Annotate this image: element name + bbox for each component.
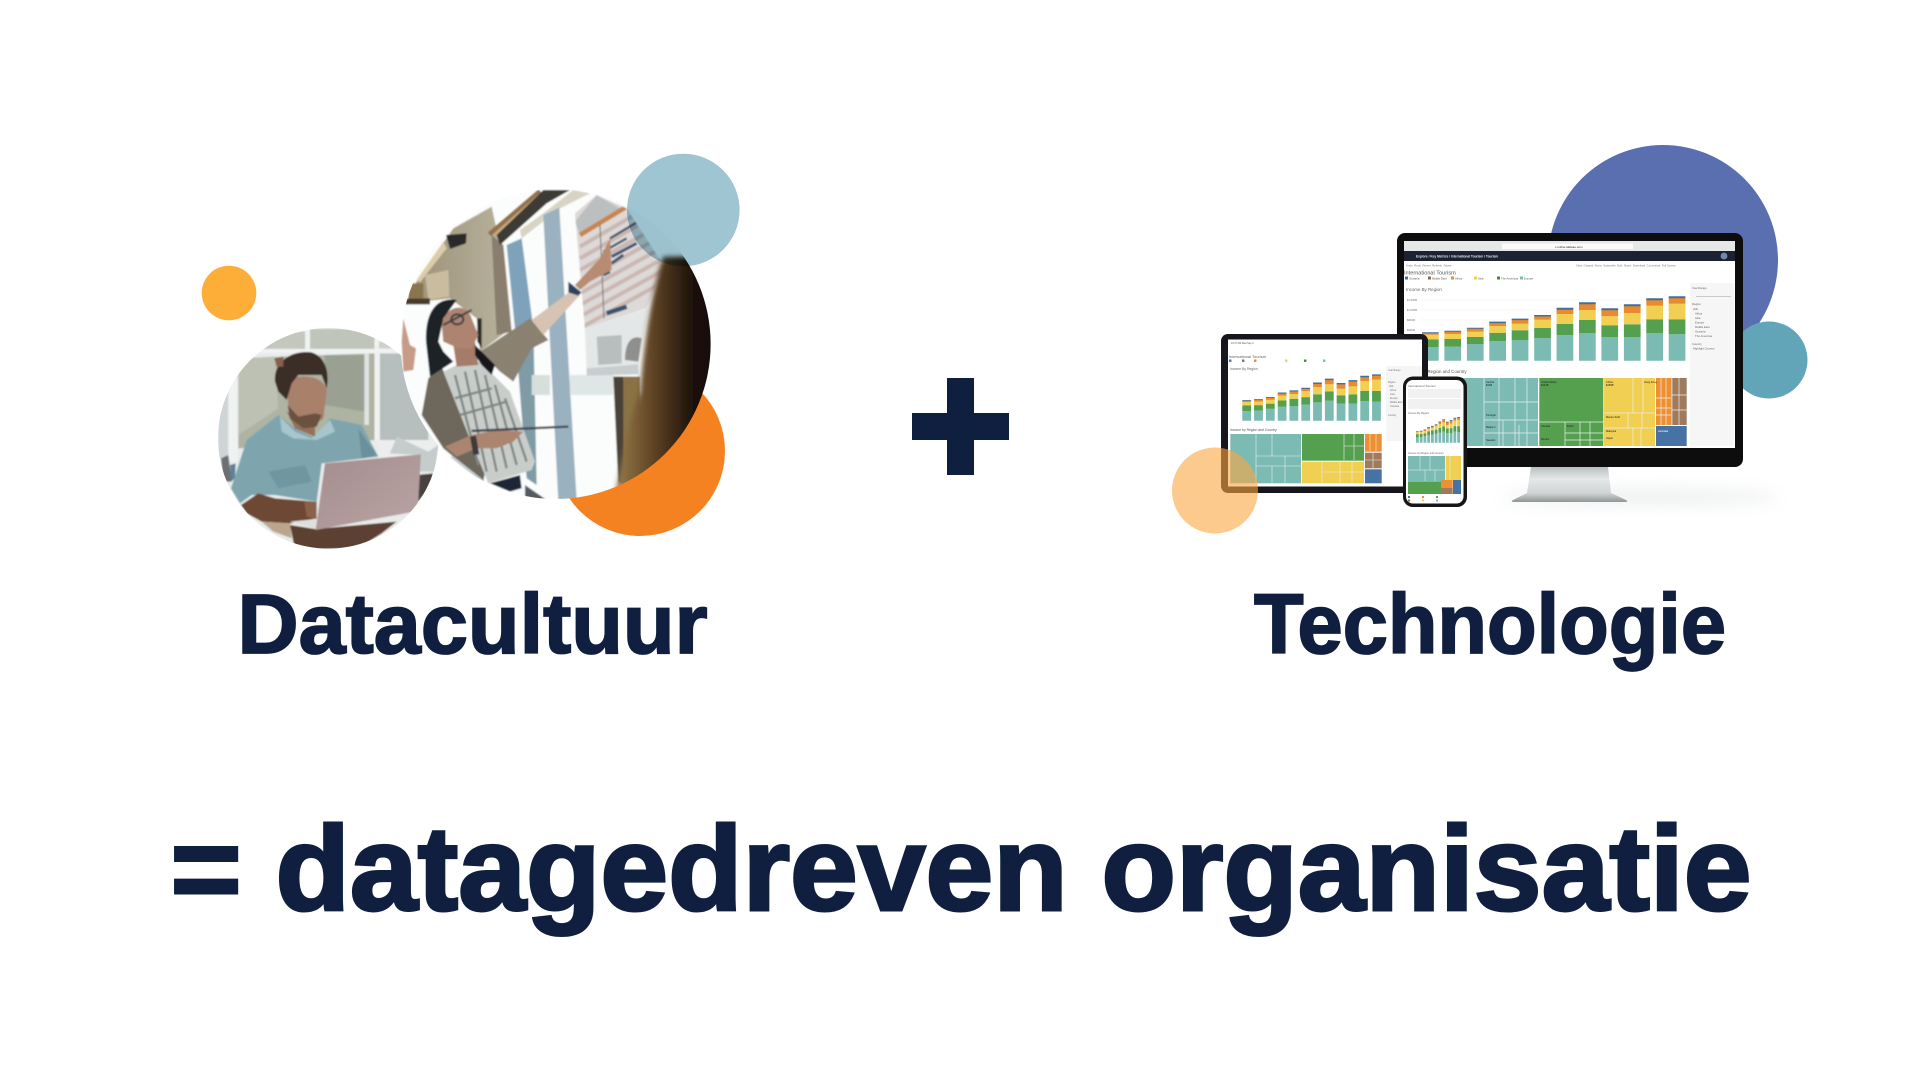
- tablet screen: Income By Region: [1230, 367, 1258, 371]
- monitor filter sidebar: [1690, 283, 1734, 446]
- phone with dashboard: [1403, 376, 1467, 507]
- tablet screen: 10:27 AM Wed Sep 4: [1231, 342, 1254, 345]
- monitor screen: Income by Region and Country: [1406, 369, 1467, 374]
- monitor y-axis labels: [1407, 298, 1417, 332]
- monitor treemap: $289B: [1606, 383, 1614, 387]
- tablet screen: International Tourism: [1229, 354, 1267, 359]
- monitor legend: Middle East: [1432, 276, 1447, 280]
- monitor filter sidebar: (All): [1693, 307, 1698, 311]
- monitor screen: Undo Redo Revert Refresh Pause: [1406, 264, 1452, 268]
- monitor y-axis labels: $1,000M: [1407, 308, 1417, 312]
- decorative circle: indigo: [1548, 145, 1778, 375]
- tablet filter sidebar: Middle East: [1390, 401, 1403, 404]
- monitor stand: [1512, 467, 1627, 502]
- monitor legend: Asia: [1478, 276, 1484, 280]
- phone screen: International Tourism: [1408, 384, 1436, 388]
- tablet filter sidebar: Africa: [1390, 389, 1397, 392]
- tablet screen: Income by Region and Country: [1230, 428, 1277, 432]
- monitor y-axis labels: $800M: [1407, 318, 1415, 322]
- tablet filter sidebar: Oceania: [1390, 405, 1400, 408]
- tablet filter sidebar: Asia: [1390, 393, 1395, 396]
- monitor treemap: Hong Kong: [1644, 380, 1658, 384]
- monitor legend: Oceania: [1409, 276, 1420, 280]
- monitor filter sidebar: Middle East: [1695, 325, 1710, 329]
- monitor screen: View: Original Alerts Subscribe Edit Share Download Comments Full Screen: [1576, 264, 1676, 268]
- monitor treemap: Portugal: [1486, 413, 1496, 417]
- phone legend: [1408, 496, 1438, 502]
- monitor bezel: [1397, 233, 1743, 467]
- monitor treemap: Malaysia: [1606, 429, 1617, 433]
- decorative circle: teal: [1730, 322, 1808, 398]
- heading: Datacultuur: Datacultuur: [238, 577, 708, 671]
- monitor treemap: Australia: [1658, 429, 1669, 433]
- phone screen: Income By Region: [1408, 411, 1430, 415]
- tablet with dashboard: [1221, 334, 1428, 493]
- monitor filter sidebar: Oceania: [1695, 330, 1706, 334]
- monitor screen: Income By Region: [1406, 287, 1442, 292]
- tablet filter sidebar: (All): [1389, 385, 1393, 388]
- monitor treemap: [1406, 378, 1687, 446]
- phone bar chart: [1416, 417, 1460, 443]
- phone screen: Income by Region and Country: [1408, 451, 1444, 455]
- monitor filter sidebar: Highlight Country: [1693, 346, 1715, 350]
- decorative circle: light blue: [627, 154, 740, 266]
- tablet filter sidebar: Region: [1388, 381, 1396, 384]
- photo: woman presenting at a screen: [401, 189, 711, 499]
- monitor legend: The Americas: [1501, 276, 1519, 280]
- monitor with dashboard: [1397, 233, 1743, 502]
- tablet screen: [1228, 340, 1422, 486]
- monitor treemap: United States: [1541, 380, 1557, 384]
- photo: man working on laptop: [215, 325, 445, 555]
- decorative circle: small orange dot: [202, 266, 256, 320]
- monitor treemap: $243B: [1541, 383, 1549, 387]
- monitor filter sidebar: Country: [1692, 342, 1702, 346]
- monitor filter sidebar: The Americas: [1695, 334, 1713, 338]
- plus sign: [912, 378, 1009, 475]
- tablet bezel: [1221, 334, 1428, 493]
- monitor treemap: Belgium: [1486, 425, 1495, 429]
- tablet filter sidebar: Europe: [1390, 397, 1398, 400]
- heading: Technologie: Technologie: [1254, 577, 1726, 671]
- monitor filter sidebar: Year Range: [1692, 286, 1707, 290]
- monitor treemap: Mexico: [1541, 437, 1550, 441]
- monitor treemap: $24B: [1486, 383, 1492, 387]
- phone bezel: [1403, 376, 1467, 507]
- monitor bar chart: [1422, 296, 1685, 361]
- monitor screen: International Tourism: [1404, 270, 1456, 276]
- monitor treemap: Austria: [1486, 380, 1495, 384]
- monitor legend: [1405, 276, 1533, 280]
- monitor y-axis labels: $1,500M: [1407, 298, 1417, 302]
- tablet filter sidebar: Year Range: [1388, 369, 1401, 372]
- monitor treemap: Brazil: [1567, 424, 1574, 428]
- monitor screen: c.online.tableau.com: [1555, 245, 1583, 249]
- monitor filter sidebar: Europe: [1695, 320, 1704, 324]
- monitor treemap: Japan: [1606, 436, 1614, 440]
- monitor screen: [1404, 241, 1735, 448]
- monitor screen: Explore / Key Metrics / International Tourism / Tourism: [1416, 254, 1498, 258]
- monitor shadow: [1500, 489, 1780, 505]
- monitor treemap: Sweden: [1486, 438, 1496, 442]
- monitor filter sidebar: Africa: [1695, 312, 1703, 316]
- monitor legend: Africa: [1455, 276, 1463, 280]
- monitor legend: Europe: [1524, 276, 1533, 280]
- main statement: = datagedreven organisatie: [170, 802, 1752, 936]
- phone screen: [1406, 380, 1464, 504]
- monitor filter sidebar: Region: [1692, 302, 1701, 306]
- tablet bar chart: [1242, 374, 1381, 421]
- monitor treemap: China: [1606, 380, 1613, 384]
- monitor treemap: Canada: [1541, 424, 1551, 428]
- tablet treemap: [1230, 434, 1382, 483]
- tablet filter sidebar: [1386, 366, 1422, 441]
- monitor treemap: Macau SAR: [1606, 415, 1620, 419]
- phone treemap: [1408, 456, 1461, 494]
- decorative circle: pale orange overlapping tablet: [1172, 448, 1258, 534]
- monitor y-axis labels: $600M: [1407, 328, 1415, 332]
- decorative circle: large orange: [555, 366, 725, 536]
- tablet filter sidebar: Country: [1388, 414, 1397, 417]
- tablet legend: [1229, 360, 1325, 362]
- monitor filter sidebar: Asia: [1695, 316, 1701, 320]
